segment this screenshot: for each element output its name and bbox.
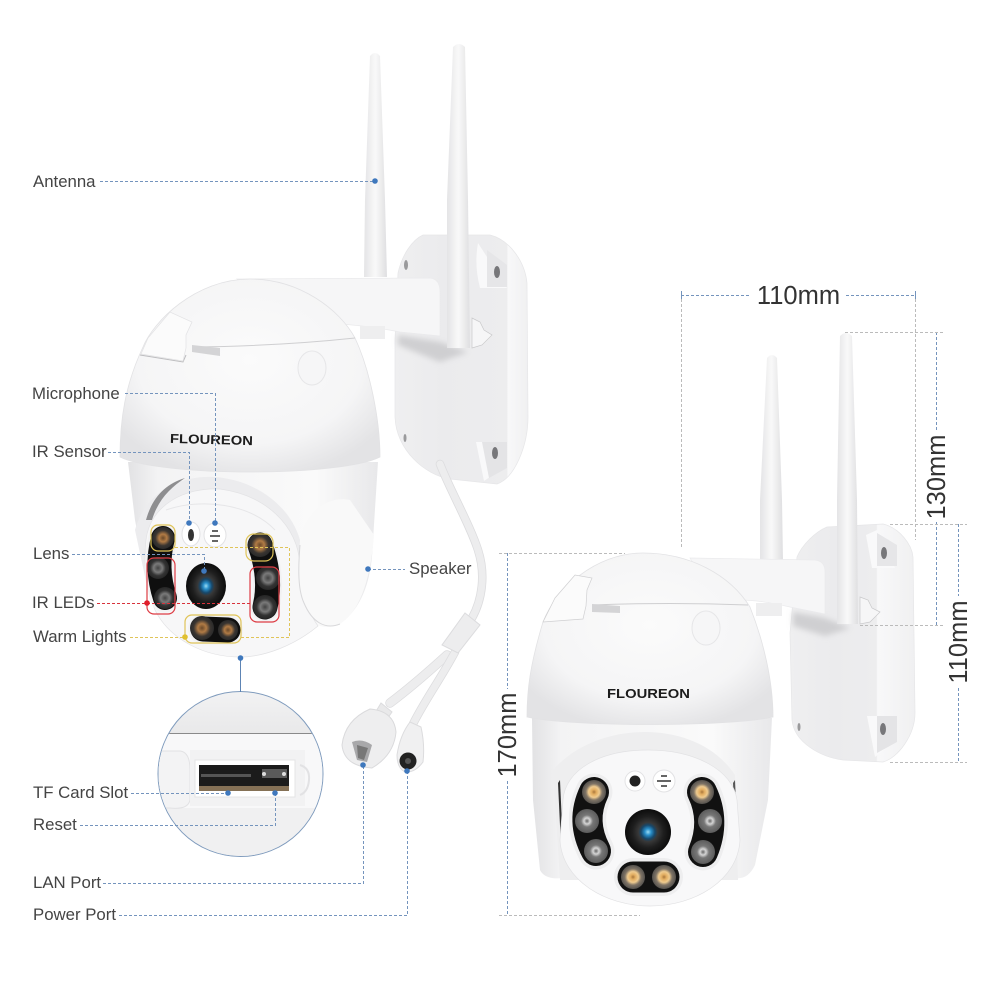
- callout: LAN port: [33, 762, 366, 892]
- arm bracket: [360, 326, 385, 339]
- lens: [186, 563, 226, 609]
- callout: microphone: Microphone: [32, 384, 120, 403]
- wing edge: [299, 545, 340, 626]
- callout: antenna: Antenna: [33, 172, 96, 191]
- antenna back: [760, 355, 783, 562]
- dimension: antenna height 130mm: 130mm: [923, 434, 951, 520]
- dimension: antenna height 130mm: [845, 332, 951, 626]
- callout: IR sensor: IR Sensor: [32, 442, 107, 461]
- leds: [575, 780, 722, 889]
- dome latch: [543, 575, 592, 622]
- dome slot: [592, 604, 620, 613]
- callout: speaker: Speaker: [409, 559, 472, 578]
- ball: [560, 750, 740, 906]
- ir sensor: [625, 771, 645, 791]
- antenna front: [837, 333, 858, 624]
- callout: LAN port: LAN Port: [33, 873, 101, 892]
- wall mount plate: [395, 235, 528, 484]
- callout: TF card slot: TF Card Slot: [33, 783, 128, 802]
- callout: microphone: [32, 384, 218, 526]
- callout: IR LEDs: IR LEDs: [32, 593, 94, 612]
- arm bracket: [756, 603, 782, 616]
- dimension: plate height 110mm: [890, 524, 973, 762]
- dome seam: [140, 338, 355, 362]
- left camera: [120, 44, 528, 772]
- arm: [690, 558, 825, 614]
- shell opening: [135, 477, 315, 657]
- dimension: width 110mm: 110mm: [757, 282, 840, 310]
- microphone grille: [204, 523, 226, 547]
- led housings: [587, 792, 709, 877]
- logo: FLOUREON: [170, 431, 253, 448]
- callout: antenna: [33, 172, 378, 191]
- callout: TF card slot: [33, 783, 231, 802]
- dome seam: [592, 604, 748, 605]
- antenna clip: [860, 597, 880, 624]
- dome slot: [192, 345, 220, 356]
- LAN connector: [342, 703, 396, 768]
- cable: [390, 464, 482, 724]
- power connector: [397, 722, 424, 772]
- microphone grille: [653, 770, 675, 792]
- callout: power port: Power Port: [33, 905, 116, 924]
- antenna front: [447, 44, 470, 348]
- ir sensor: [182, 522, 200, 546]
- inset connector line: [238, 655, 243, 692]
- callout: lens: [33, 544, 207, 574]
- dome circle mark: [298, 351, 326, 385]
- dome: [527, 553, 773, 724]
- led housings: [159, 538, 268, 630]
- leds: [147, 527, 280, 640]
- callout: warm lights: Warm Lights: [33, 627, 127, 646]
- opening shadow: [146, 478, 185, 520]
- callout: power port: [33, 768, 410, 924]
- callout: warm lights: [33, 548, 290, 646]
- dimension: camera height 170mm: [494, 553, 640, 916]
- callout: IR sensor: [32, 442, 192, 526]
- dome latch: [141, 312, 192, 361]
- dimension: camera height 170mm: 170mm: [494, 692, 522, 778]
- callout: reset: [33, 790, 278, 834]
- right wing: [299, 499, 374, 626]
- arm: [237, 278, 440, 336]
- cable junction: [442, 613, 480, 653]
- antenna clip: [472, 318, 492, 348]
- wing shadows: [558, 780, 738, 847]
- logo: FLOUREON: [607, 686, 690, 701]
- right camera: [527, 333, 915, 906]
- callout: IR LEDs: [32, 593, 250, 612]
- callout: reset: Reset: [33, 815, 77, 834]
- dimension: plate height 110mm: 110mm: [945, 600, 973, 684]
- highlight boxes: [147, 525, 279, 643]
- dome circle mark: [692, 611, 720, 645]
- ball: [145, 489, 318, 657]
- antenna back: [364, 53, 387, 277]
- shell opening: [553, 732, 738, 880]
- lens: [625, 809, 671, 855]
- dome: [120, 279, 380, 472]
- lower body: [532, 718, 772, 878]
- callout: lens: Lens: [33, 544, 69, 563]
- lower body: [128, 462, 378, 657]
- callout: speaker: [365, 559, 472, 578]
- dimension: width 110mm: [681, 282, 916, 547]
- wall mount plate: [790, 524, 915, 762]
- face plate arc: [166, 504, 275, 530]
- inset: card slot detail: [150, 692, 330, 858]
